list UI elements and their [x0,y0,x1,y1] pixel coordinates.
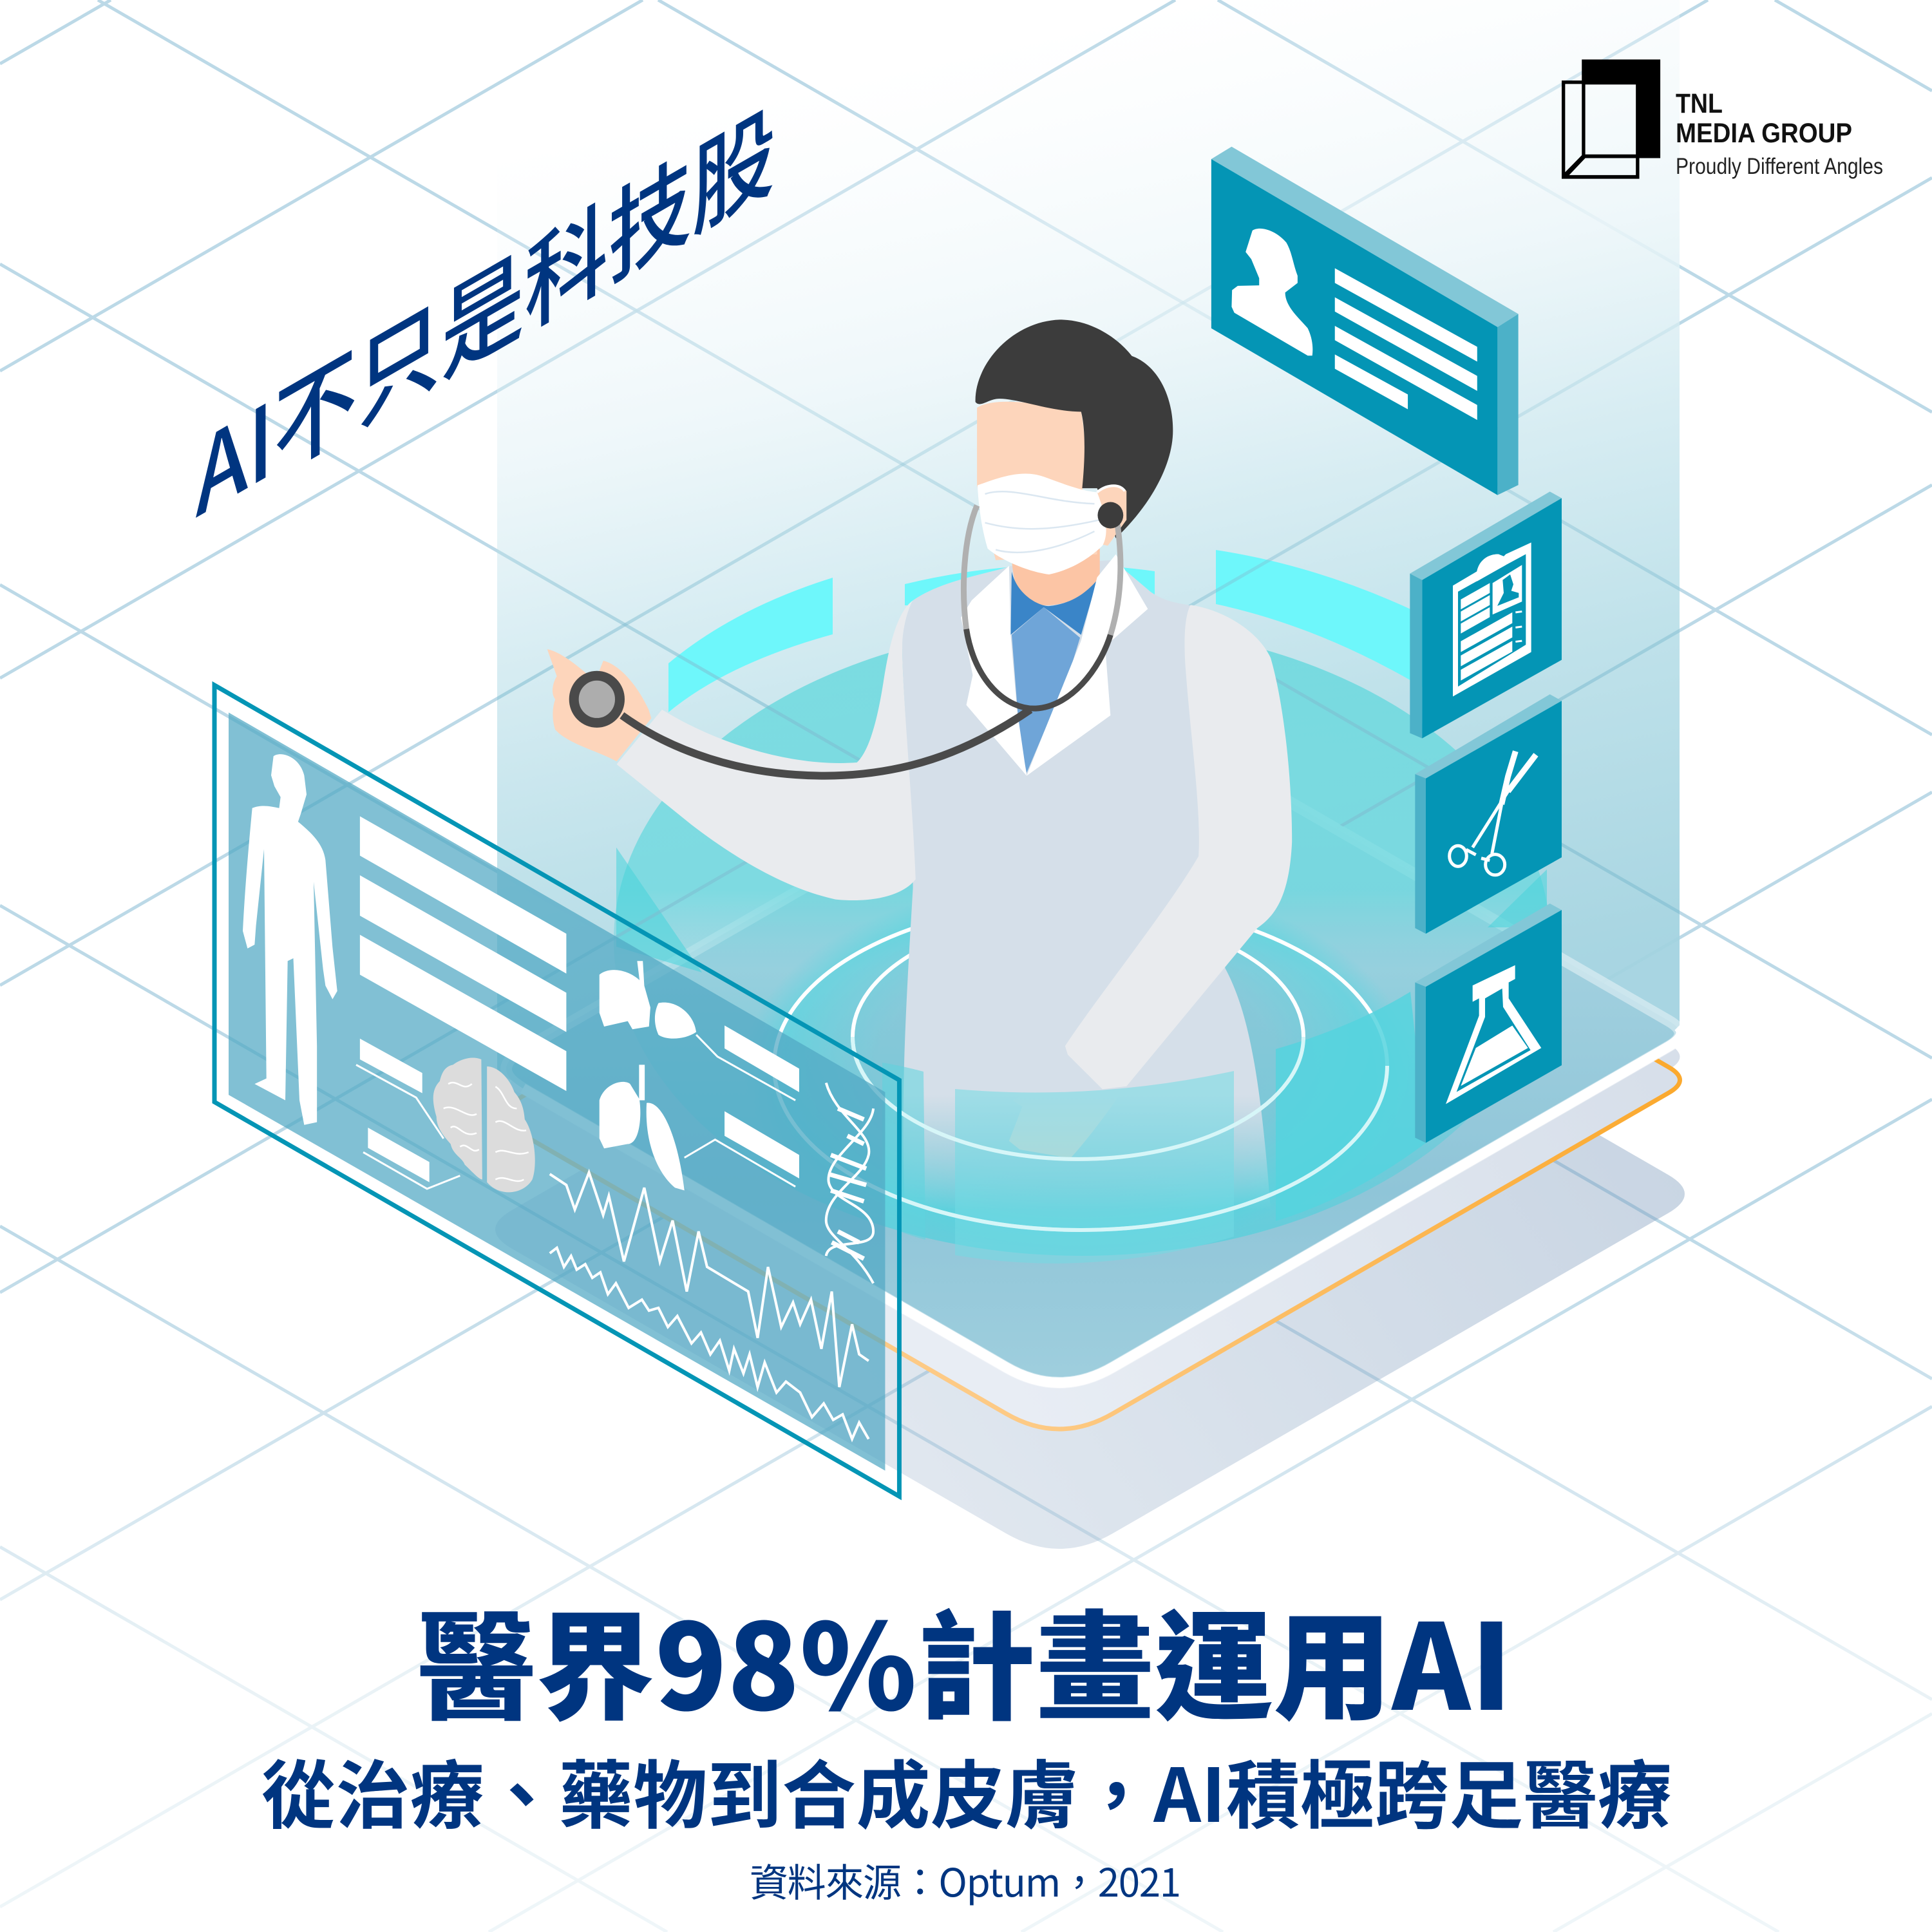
icon: person bust [1231,229,1312,355]
doctor figure [547,319,1292,1210]
doctor: coat lapels [961,554,1148,776]
card: clipboard [1410,491,1562,738]
logo text: TNL [1676,88,1723,119]
doctor: resting arm [1065,605,1292,1089]
card: surgical scissors [1415,694,1562,934]
platform top surface [506,720,1680,1383]
card: lab flask [1415,904,1562,1143]
hologram: large teal disc [614,625,1550,1256]
text lines [1335,268,1477,420]
logo text: MEDIA GROUP [1676,118,1852,149]
logo: TNL Media Group [1562,59,1883,179]
translucent glass volume [497,0,1680,1397]
connector lines [356,1035,795,1189]
doctor: coat body [902,560,1271,1210]
panel frame [214,685,899,1497]
hologram: bright cyan arcs [668,550,1436,712]
hologram: translucent front bands [882,992,1426,1264]
platform front white rim [523,1027,1681,1383]
text bars [360,816,799,1182]
doctor: shirt front [1012,607,1080,773]
doctor: lower hand [1009,1066,1124,1158]
panel fill [229,712,885,1471]
hologram: white rings [774,902,1387,1230]
doctor: shirt collar [1010,572,1097,635]
main title: 醫界98%計畫運用AI [417,1573,1512,1744]
doctor: stethoscope [574,502,1123,776]
hologram: front ring highlights [774,1037,1387,1230]
doctor: raised hand [547,649,651,761]
ECG chart [550,1173,869,1387]
logo text: Proudly Different Angles [1676,154,1883,179]
icon: liver and stomach [600,961,696,1039]
medical data panel [214,685,899,1497]
doctor: ear [1094,486,1126,545]
logo mark [1562,59,1660,179]
card: patient profile [1211,147,1519,495]
doctor: face mask [978,473,1125,574]
doctor: hair [976,319,1173,538]
icon: DNA helix [826,1083,873,1283]
platform [506,720,1681,1429]
grid seen through the glass [497,292,1680,966]
skewed heading: AI不只是科技股 [196,67,775,547]
doctor: face [977,402,1097,560]
icon: lungs [600,1065,685,1191]
hologram: glow disc [743,879,1413,1253]
hologram: darker wedges [616,848,1547,972]
doctor: extended arm [617,600,916,900]
source note: 資料來源：Optum，2021 [750,1852,1181,1908]
icon: brain [433,1058,535,1192]
subtitle: 從治療、藥物到合成皮膚，AI積極跨足醫療 [261,1737,1672,1844]
waveform chart [550,1248,869,1439]
shadow under platform [495,875,1685,1549]
doctor: neck [1012,549,1100,605]
logo text [1676,88,1883,179]
icon: human body [243,754,337,1125]
icon cards column [1410,491,1562,1143]
platform side with orange edge [506,743,1680,1429]
